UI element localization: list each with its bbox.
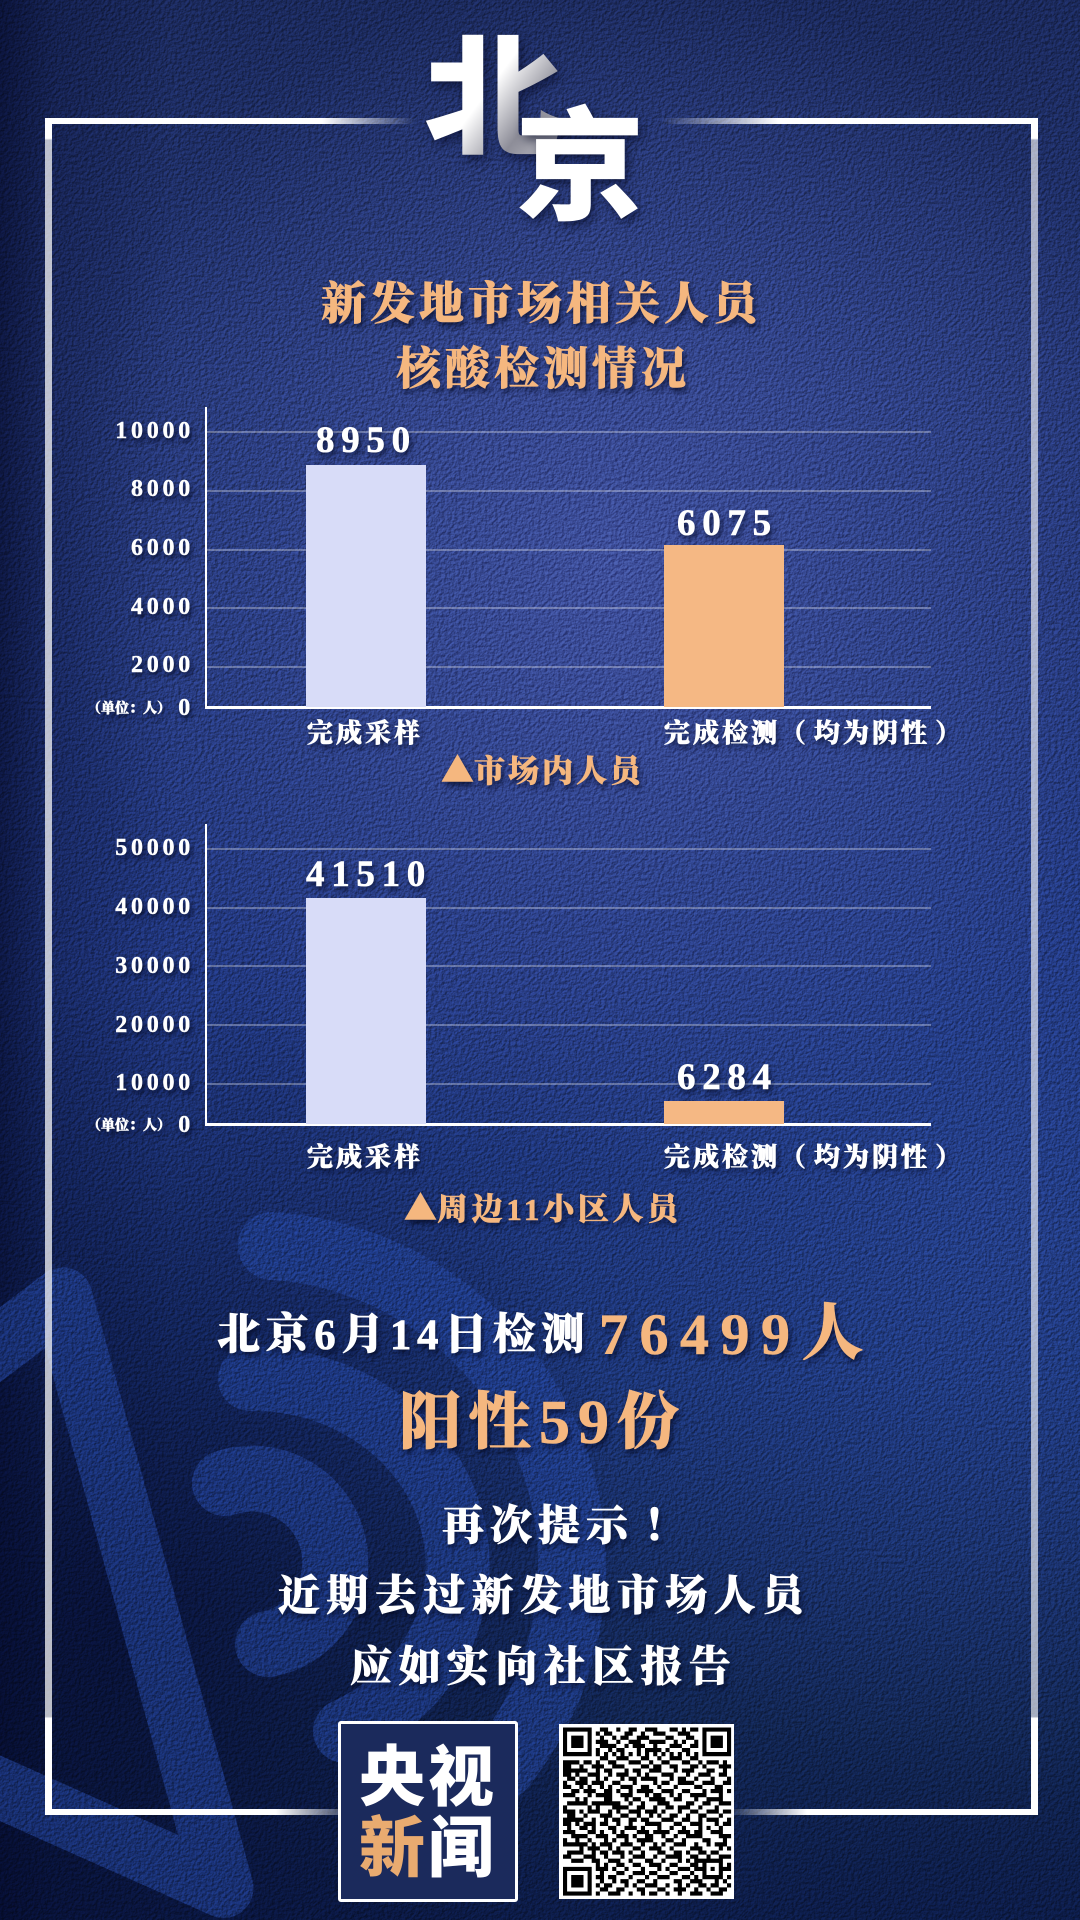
- unit label: （单位：人）: [87, 702, 171, 717]
- heading: 新发地市场相关人员 核酸检测情况: 新发地市场相关人员: [321, 279, 762, 329]
- reminder text: 应如实向社区报告: [350, 1645, 737, 1691]
- bar chart: 周边11小区人员: 30000: [115, 953, 194, 979]
- title: 北京: 北: [424, 26, 562, 172]
- bar chart: 周边11小区人员: 40000: [115, 894, 194, 920]
- value: 6284: 6284: [677, 1057, 778, 1098]
- QR code: [559, 1724, 734, 1899]
- stat: 北京6月14日检测76499人: 76499人: [599, 1300, 875, 1368]
- stat: 北京6月14日检测76499人: 北京6月14日检测: [217, 1312, 590, 1359]
- reminder text: 近期去过新发地市场人员: [278, 1574, 810, 1620]
- logo: 央视新闻: 视: [428, 1740, 494, 1814]
- unit label: （单位：人）: [87, 1119, 171, 1134]
- bar: 完成检测 6075: [664, 545, 784, 707]
- bar chart: 市场内人员: 8000: [131, 476, 194, 502]
- stat: 阳性59份: 阳性59份: [399, 1389, 687, 1457]
- bar chart: 周边11小区人员: 0: [178, 1112, 194, 1138]
- bar chart: 周边11小区人员: 10000: [115, 1070, 194, 1096]
- bar chart: 市场内人员: 0: [178, 695, 194, 721]
- reminder text: 再次提示！: [442, 1504, 692, 1550]
- value: 8950: 8950: [316, 420, 417, 461]
- category: 完成采样: 完成采样: [307, 719, 423, 748]
- bar chart: 市场内人员: 4000: [131, 594, 194, 620]
- title: 北京: [424, 26, 646, 236]
- watermark: broadcast logo: [0, 1212, 606, 1918]
- logo: 央视新闻: 新: [359, 1811, 425, 1885]
- value: 41510: 41510: [306, 854, 432, 895]
- bar: 完成检测 6284: [664, 1101, 784, 1124]
- caption: 市场内人员: ▲市场内人员: [441, 744, 644, 792]
- category: 完成采样: 完成采样: [307, 1143, 423, 1172]
- category: 完成检测（均为阴性）: 完成检测（均为阴性）: [664, 719, 964, 748]
- heading: 新发地市场相关人员 核酸检测情况: 核酸检测情况: [396, 344, 690, 394]
- bar chart: 市场内人员: [87, 407, 964, 792]
- stat: 北京6月14日检测76499人: [217, 1300, 875, 1368]
- bar chart: 市场内人员: 10000: [115, 418, 194, 444]
- bar: 完成采样 41510: [306, 898, 426, 1124]
- logo: 央视新闻: [338, 1721, 518, 1902]
- bar: 完成采样 8950: [306, 465, 426, 707]
- bar chart: 周边11小区人员: [87, 824, 964, 1230]
- caption: 周边11小区人员: ▲周边11小区人员: [404, 1182, 682, 1230]
- title: 北京: 京: [515, 98, 645, 236]
- value: 6075: 6075: [677, 503, 778, 544]
- logo: 央视新闻: 闻: [428, 1811, 494, 1885]
- reminder text: [278, 1503, 810, 1692]
- category: 完成检测（均为阴性）: 完成检测（均为阴性）: [664, 1143, 964, 1172]
- bar chart: 周边11小区人员: 20000: [115, 1012, 194, 1038]
- heading: 新发地市场相关人员 核酸检测情况: [321, 279, 762, 396]
- logo: 央视新闻: 央: [359, 1740, 425, 1814]
- bar chart: 市场内人员: 6000: [131, 535, 194, 561]
- bar chart: 周边11小区人员: 50000: [115, 835, 194, 861]
- bar chart: 市场内人员: 2000: [131, 652, 194, 678]
